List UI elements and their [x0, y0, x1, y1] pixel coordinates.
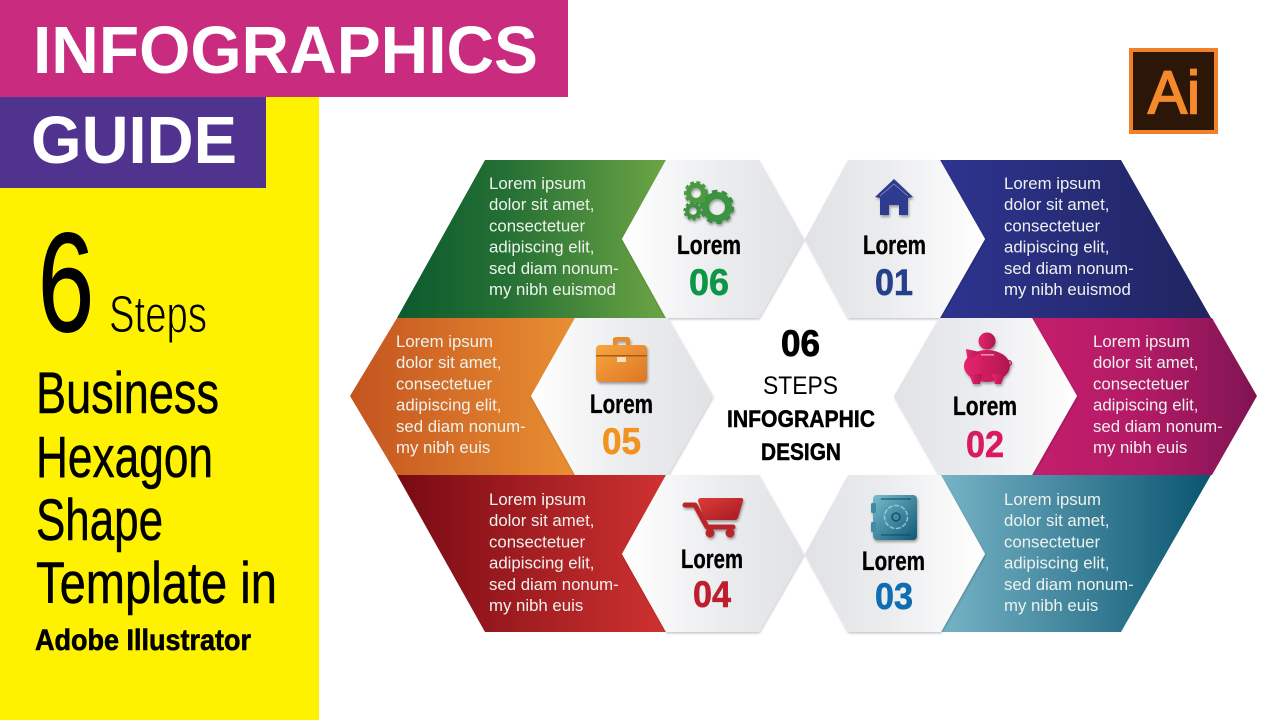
- heading: 6 Steps: 6: [38, 203, 94, 361]
- icon: house: [875, 179, 913, 215]
- panel: step 03: sed diam nonum-: [1004, 575, 1134, 594]
- panel: step 05: Lorem ipsum: [396, 332, 493, 351]
- yellow side panel: [0, 0, 319, 720]
- panel: step 01: dolor sit amet,: [1004, 195, 1109, 214]
- side panel description: Adobe Illustrator: [35, 624, 251, 657]
- panel: step 05: my nibh euis: [396, 438, 490, 457]
- icon: piggy bank: [964, 332, 1011, 384]
- center heading: INFOGRAPHIC: [727, 406, 875, 433]
- icon: briefcase: [596, 337, 647, 382]
- panel: step 02: 02: [966, 424, 1004, 465]
- panel: step 06: 06: [689, 262, 729, 303]
- panel: step 04: Lorem ipsum: [489, 490, 586, 509]
- icon: gears: [685, 182, 732, 222]
- subtitle banner: GUIDE: GUIDE: [31, 103, 237, 178]
- panel: step 03: dolor sit amet,: [1004, 511, 1109, 530]
- side panel description: [35, 361, 277, 657]
- panel: step 03: my nibh euis: [1004, 596, 1098, 615]
- title banner: INFOGRAPHICS: INFOGRAPHICS: [33, 13, 538, 88]
- panel: step 04: adipiscing elit,: [489, 554, 594, 573]
- panel: step 05: sed diam nonum-: [396, 417, 526, 436]
- panel: step 04: 04: [693, 574, 731, 615]
- subtitle banner: GUIDE: [0, 97, 266, 188]
- panel: step 04: sed diam nonum-: [489, 575, 619, 594]
- panel: step 03: 03: [875, 576, 913, 617]
- panel: step 06: [397, 160, 804, 318]
- icon: Adobe Illustrator logo: [1131, 50, 1216, 132]
- panel: step 06: Lorem: [677, 230, 741, 260]
- panel: step 01: sed diam nonum-: [1004, 259, 1134, 278]
- panel: step 01: Lorem: [863, 230, 926, 260]
- icon: shopping cart: [685, 498, 743, 538]
- panel: step 06: my nibh euismod: [489, 280, 616, 299]
- center heading: [727, 323, 875, 466]
- panel: step 05: 05: [602, 421, 641, 462]
- panel: step 04: Lorem: [681, 544, 743, 574]
- panel: step 01: my nibh euismod: [1004, 280, 1131, 299]
- icon: safe: [871, 495, 917, 540]
- panel: step 02: my nibh euis: [1093, 438, 1187, 457]
- panel: step 02: Lorem ipsum: [1093, 332, 1190, 351]
- heading: 6 Steps: [38, 203, 207, 361]
- title banner: INFOGRAPHICS: [0, 0, 568, 97]
- heading: 6 Steps: Steps: [109, 286, 207, 344]
- panel: step 04: my nibh euis: [489, 596, 583, 615]
- center heading: DESIGN: [761, 439, 841, 466]
- center heading: STEPS: [763, 372, 838, 400]
- panel: step 02: dolor sit amet,: [1093, 353, 1198, 372]
- side panel description: Hexagon: [36, 425, 213, 490]
- panel: step 01: [805, 160, 1211, 318]
- panel: step 06: adipiscing elit,: [489, 238, 594, 257]
- panel: step 06: consectetuer: [489, 216, 585, 235]
- panel: step 04: dolor sit amet,: [489, 511, 594, 530]
- panel: step 04: [397, 475, 804, 632]
- panel: step 05: consectetuer: [396, 374, 492, 393]
- panel: step 02: adipiscing elit,: [1093, 396, 1198, 415]
- panel: step 03: consectetuer: [1004, 532, 1100, 551]
- panel: step 02: [894, 318, 1257, 475]
- panel: step 06: Lorem ipsum: [489, 174, 586, 193]
- panel: step 01: 01: [875, 262, 913, 303]
- icon: Adobe Illustrator logo: Ai: [1148, 59, 1200, 126]
- panel: step 06: sed diam nonum-: [489, 259, 619, 278]
- panel: step 05: [350, 318, 713, 475]
- panel: step 05: adipiscing elit,: [396, 396, 501, 415]
- panel: step 02: Lorem: [953, 391, 1017, 421]
- panel: step 01: adipiscing elit,: [1004, 238, 1109, 257]
- panel: step 01: Lorem ipsum: [1004, 174, 1101, 193]
- panel: step 01: consectetuer: [1004, 216, 1100, 235]
- panel: step 03: adipiscing elit,: [1004, 554, 1109, 573]
- panel: step 02: consectetuer: [1093, 374, 1189, 393]
- panel: step 03: [805, 475, 1211, 632]
- side panel description: Template in: [36, 551, 277, 616]
- panel: step 06: dolor sit amet,: [489, 195, 594, 214]
- side panel description: Business: [36, 361, 219, 426]
- panel: step 03: Lorem: [862, 546, 925, 576]
- panel: step 04: consectetuer: [489, 532, 585, 551]
- panel: step 03: Lorem ipsum: [1004, 490, 1101, 509]
- panel: step 05: Lorem: [590, 389, 653, 419]
- side panel description: Shape: [36, 488, 163, 553]
- center heading: 06: [781, 323, 820, 364]
- panel: step 02: sed diam nonum-: [1093, 417, 1223, 436]
- panel: step 05: dolor sit amet,: [396, 353, 501, 372]
